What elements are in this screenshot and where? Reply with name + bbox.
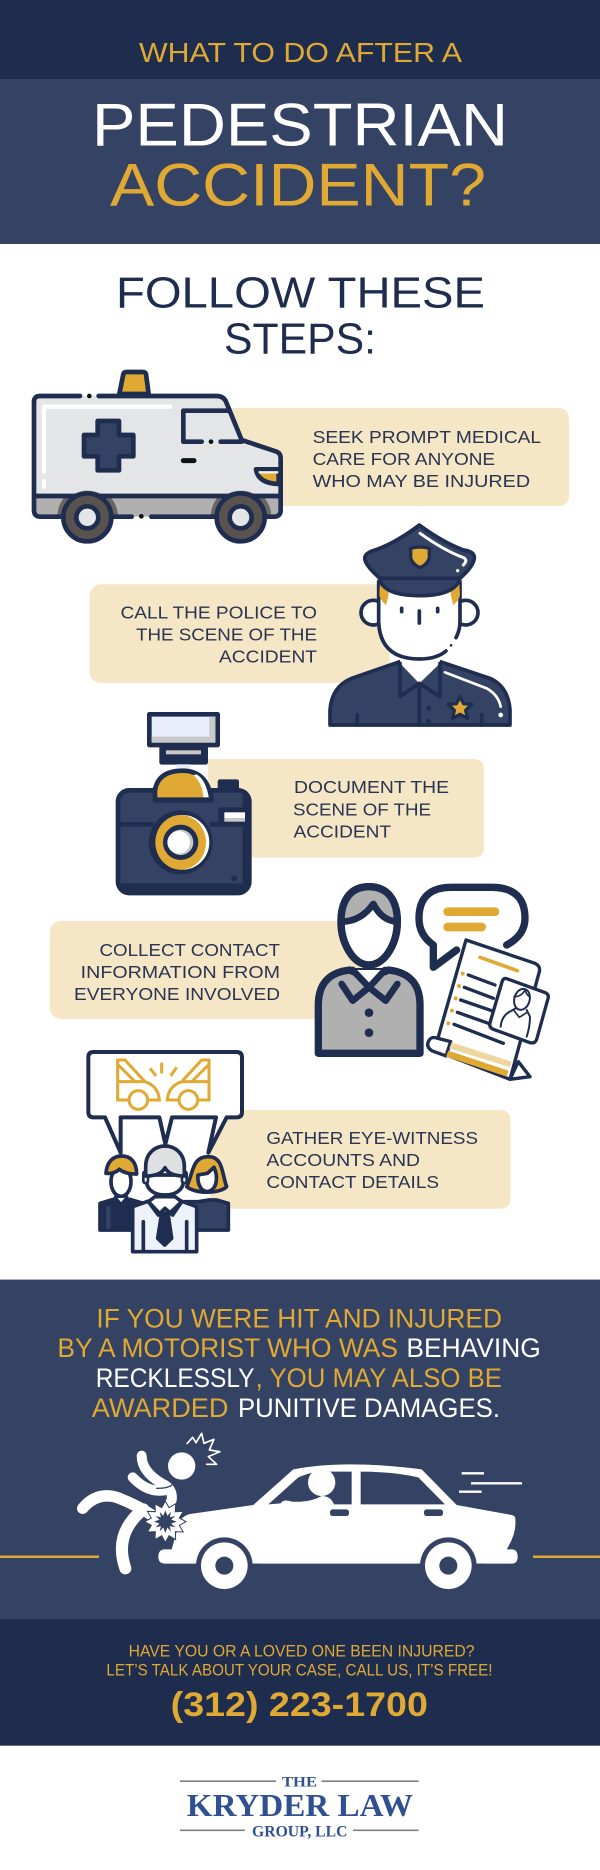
panel: step 2 call the police xyxy=(90,525,510,725)
text: punitive damages statement: IF YOU WERE HIT AND INJURED xyxy=(96,1303,502,1333)
text: step 5: ACCOUNTS AND xyxy=(266,1150,420,1170)
panel: step 4 collect contact information xyxy=(50,887,548,1079)
panel: call to action xyxy=(0,1619,600,1746)
text: step 1: WHO MAY BE INJURED xyxy=(313,471,530,491)
text: step 3: ACCIDENT xyxy=(294,822,391,842)
text: step 5: GATHER EYE-WITNESS xyxy=(266,1128,478,1148)
text: step 3: SCENE OF THE xyxy=(293,800,431,820)
panel: step 1 seek medical care xyxy=(34,372,569,541)
text: step 1: SEEK PROMPT MEDICAL xyxy=(313,427,541,447)
car xyxy=(158,1464,522,1594)
road line right xyxy=(533,1556,600,1558)
heading: what to do after a: WHAT TO DO AFTER A xyxy=(139,37,463,68)
text: step 1: CARE FOR ANYONE xyxy=(313,449,495,469)
text: step 4: COLLECT CONTACT xyxy=(100,940,280,960)
text: call to action xyxy=(106,1642,493,1680)
icon: person with document xyxy=(318,887,548,1079)
text: step 4 xyxy=(74,940,280,1004)
panel: step 5 gather eye-witness accounts xyxy=(88,1052,510,1252)
icon: ambulance xyxy=(34,372,281,541)
icon: witnesses with speech bubble xyxy=(88,1052,242,1252)
logo: the kryder law group: KRYDER LAW xyxy=(187,1787,413,1823)
text: step 2: THE SCENE OF THE xyxy=(136,625,317,645)
text: step 5 xyxy=(266,1128,478,1192)
text: punitive damages statement: , YOU MAY ALSO BE xyxy=(256,1363,502,1393)
text: punitive damages statement: BEHAVING xyxy=(406,1333,541,1363)
logo: the kryder law group: GROUP, LLC xyxy=(252,1823,348,1840)
heading: accident: ACCIDENT? xyxy=(110,151,486,219)
text: step 2: CALL THE POLICE TO xyxy=(120,603,317,623)
pedestrian xyxy=(83,1433,220,1568)
text: step 4: INFORMATION FROM xyxy=(81,962,280,982)
road line left xyxy=(0,1556,99,1558)
panel: step 3 document the scene xyxy=(118,714,484,893)
logo: the kryder law group: THE xyxy=(282,1775,317,1791)
panel: punitive damages xyxy=(0,1280,600,1619)
phone number: (312) 223-1700 xyxy=(171,1686,428,1724)
text: step 2 xyxy=(120,603,317,667)
heading: follow these steps: FOLLOW THESE xyxy=(116,268,485,318)
impact burst xyxy=(145,1501,186,1542)
text: punitive damages statement xyxy=(57,1303,541,1423)
heading: pedestrian: PEDESTRIAN xyxy=(92,91,508,159)
text: step 3: DOCUMENT THE xyxy=(294,777,449,797)
text: step 5: CONTACT DETAILS xyxy=(266,1172,439,1192)
panel: header xyxy=(0,0,600,244)
heading: follow these steps xyxy=(116,268,485,364)
icon: police officer xyxy=(330,525,510,725)
text: step 4: EVERYONE INVOLVED xyxy=(74,984,280,1004)
text: step 3 xyxy=(293,777,449,842)
text: call to action: LET’S TALK ABOUT YOUR CASE, CALL US, IT’S FREE! xyxy=(106,1661,493,1680)
text: punitive damages statement: AWARDED xyxy=(92,1393,228,1423)
logo: the kryder law group xyxy=(180,1775,419,1840)
text: step 1 xyxy=(313,427,541,491)
text: punitive damages statement: RECKLESSLY xyxy=(96,1363,254,1393)
text: punitive damages statement: BY A MOTORIST WHO WAS xyxy=(57,1333,398,1363)
text: punitive damages statement: PUNITIVE DAMAGES. xyxy=(238,1393,500,1423)
text: step 2: ACCIDENT xyxy=(219,647,317,667)
text: call to action: HAVE YOU OR A LOVED ONE BEEN INJURED? xyxy=(129,1642,474,1660)
icon: car hitting pedestrian xyxy=(83,1433,522,1594)
heading: follow these steps: STEPS: xyxy=(224,315,376,364)
icon: camera xyxy=(118,714,249,893)
